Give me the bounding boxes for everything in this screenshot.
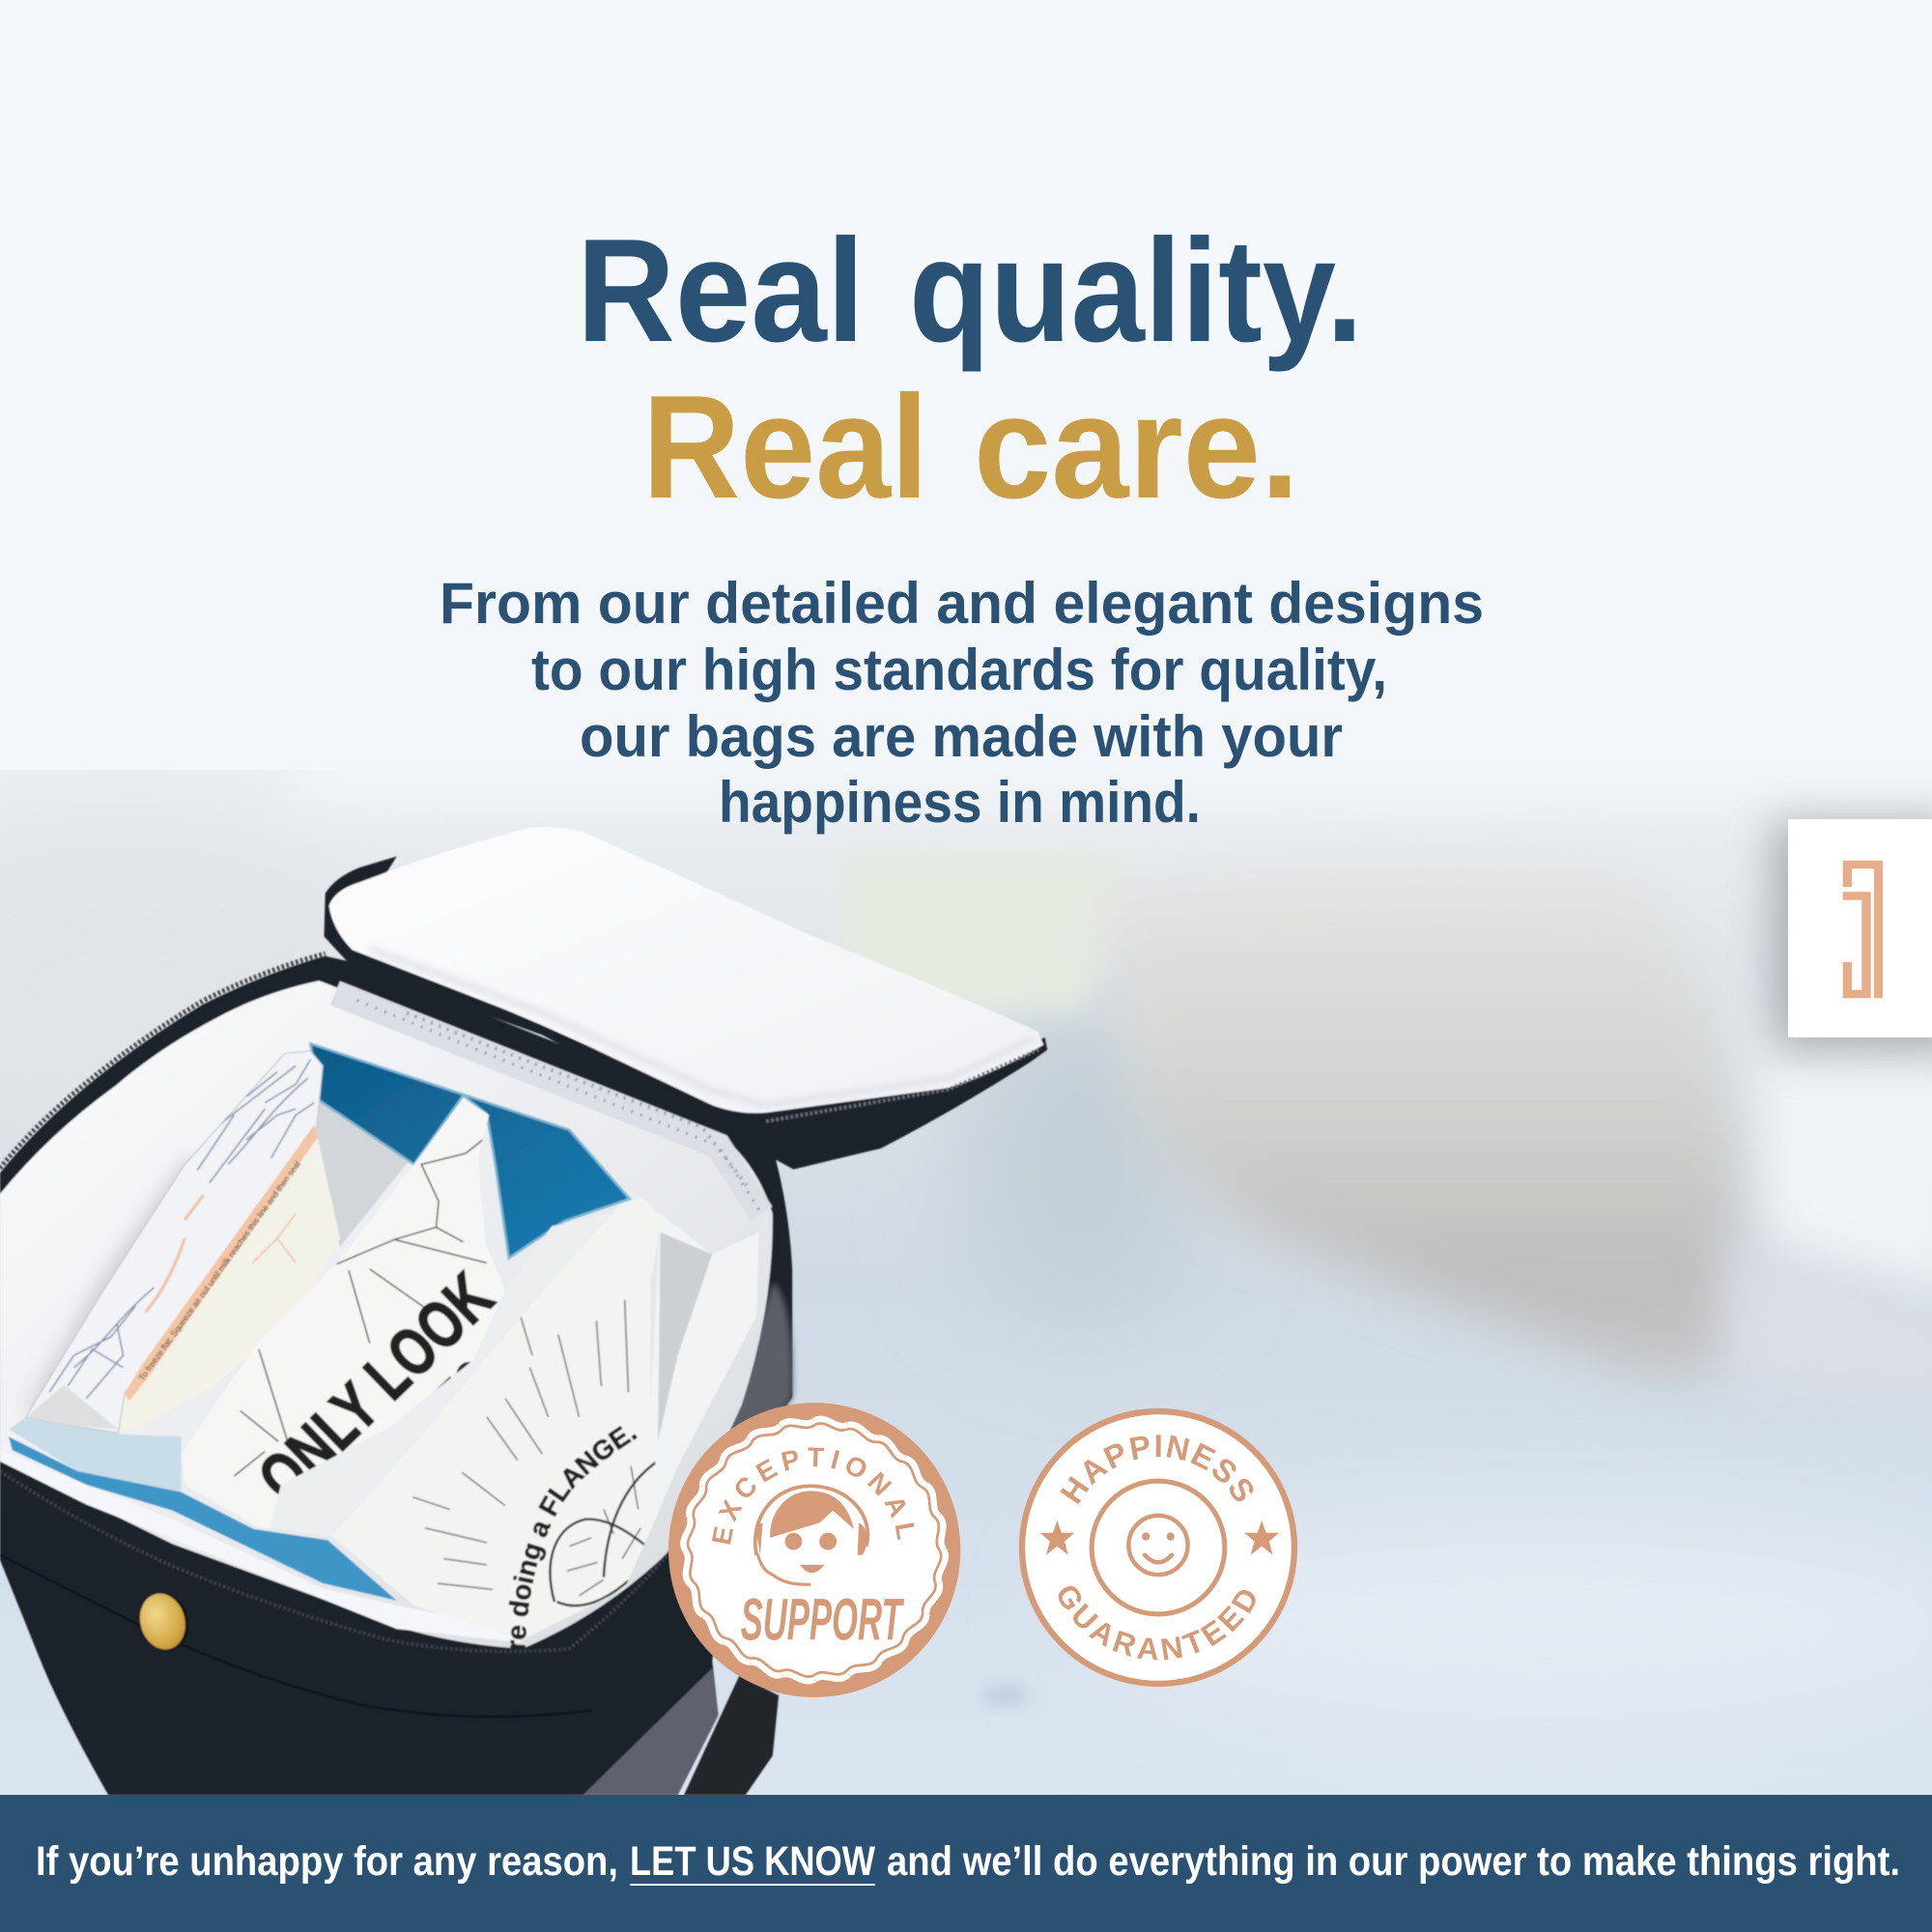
badge: happiness guaranteed	[1018, 1408, 1298, 1687]
milk pouch 2	[182, 1103, 504, 1528]
footer message: LET US KNOW	[630, 1838, 875, 1885]
bag side panel	[582, 1668, 719, 1795]
blue gel pack top	[310, 1043, 630, 1258]
footer message: If you’re unhappy for any reason,	[36, 1838, 618, 1885]
icon: brand monogram	[1843, 861, 1883, 998]
headline word: Real: Real	[577, 209, 865, 373]
mesh dots second row	[407, 1012, 747, 1185]
star left	[1040, 1520, 1074, 1555]
pouch 3 slogan: re doing a FLANGE.	[508, 1425, 638, 1650]
bag shoulder strap	[684, 1676, 779, 1795]
wavy scalloped ring	[680, 1416, 949, 1684]
icy gel pack edge	[9, 1417, 181, 1492]
badge arc text: EXCEPTIONAL	[712, 1447, 914, 1545]
right wall shading	[650, 1213, 759, 1511]
pouch 1 patterned panel	[26, 1051, 323, 1433]
side logo tab	[1773, 819, 1932, 1053]
zipper along left rim	[0, 953, 326, 1168]
star right	[1244, 1520, 1279, 1555]
badge disc	[668, 1403, 960, 1697]
badge disc	[1022, 1411, 1294, 1684]
pouch 3 flange icon	[550, 1460, 659, 1605]
product photo: insulated cooler bag with milk pouches	[0, 827, 1049, 1795]
white fabric strip	[0, 1450, 523, 1642]
gold snap button	[134, 1587, 195, 1657]
body copy: From our detailed and elegant designs	[440, 571, 1484, 636]
bag lining	[0, 980, 773, 1649]
icon: smiley face	[1128, 1516, 1188, 1575]
headline word: Real gold: Real	[642, 365, 928, 529]
body copy	[440, 571, 1484, 835]
pouch 3 sun rays	[412, 1300, 640, 1596]
body copy: happiness in mind.	[719, 770, 1201, 835]
top arc text: HAPPINESS	[1061, 1435, 1254, 1505]
body copy: our bags are made with your	[580, 704, 1343, 769]
milk pouch 3	[334, 1198, 660, 1650]
footer band	[0, 1795, 1932, 1932]
headline word: quality.: quality.	[909, 209, 1363, 373]
pouch 2 slogan second line: TO SEE	[423, 1281, 578, 1435]
pouch 1 orange strip	[125, 1125, 318, 1401]
right wall shadow	[658, 1233, 712, 1441]
bag lid	[324, 827, 1047, 1169]
body copy: to our high standards for quality,	[531, 638, 1387, 702]
headline	[577, 209, 1363, 529]
blue gel pack bottom	[9, 1436, 397, 1601]
milk pouch 1	[26, 1051, 340, 1433]
bag body	[0, 956, 792, 1795]
pouch 2 slogan: ONLY LOOK	[244, 1259, 507, 1516]
bottom arc text: GUARANTEED	[1059, 1586, 1256, 1660]
lining shadow behind pouch 1	[25, 1158, 210, 1417]
tissue divider	[270, 1204, 621, 1537]
pouch 1 line art	[49, 1060, 314, 1399]
grey wedge behind pouches	[310, 1100, 409, 1247]
badge: exceptional support	[668, 1403, 960, 1697]
lining mesh edge	[335, 993, 761, 1213]
pouch 1 volume marks	[252, 1213, 296, 1263]
bag right side panel	[671, 1282, 792, 1562]
tab shadow	[1773, 821, 1932, 1053]
badge word: SUPPORT	[741, 1587, 904, 1653]
mesh dots	[357, 1001, 761, 1213]
background photo: blurred marble table and pillow	[0, 657, 1932, 1795]
pouch 1 fine print: To freeze flat: Squeeze air out until milk reaches this line and then seal	[136, 1159, 302, 1382]
rim zipper along front	[0, 1471, 676, 1652]
inner ring	[1092, 1481, 1225, 1614]
footer message	[36, 1838, 1900, 1886]
icon: support agent with headset	[755, 1486, 867, 1584]
pouch 1 bottom flap	[26, 1385, 118, 1430]
body seam	[0, 1555, 591, 1717]
headline word: care.: care.	[974, 365, 1299, 529]
tab panel	[1788, 819, 1932, 1037]
